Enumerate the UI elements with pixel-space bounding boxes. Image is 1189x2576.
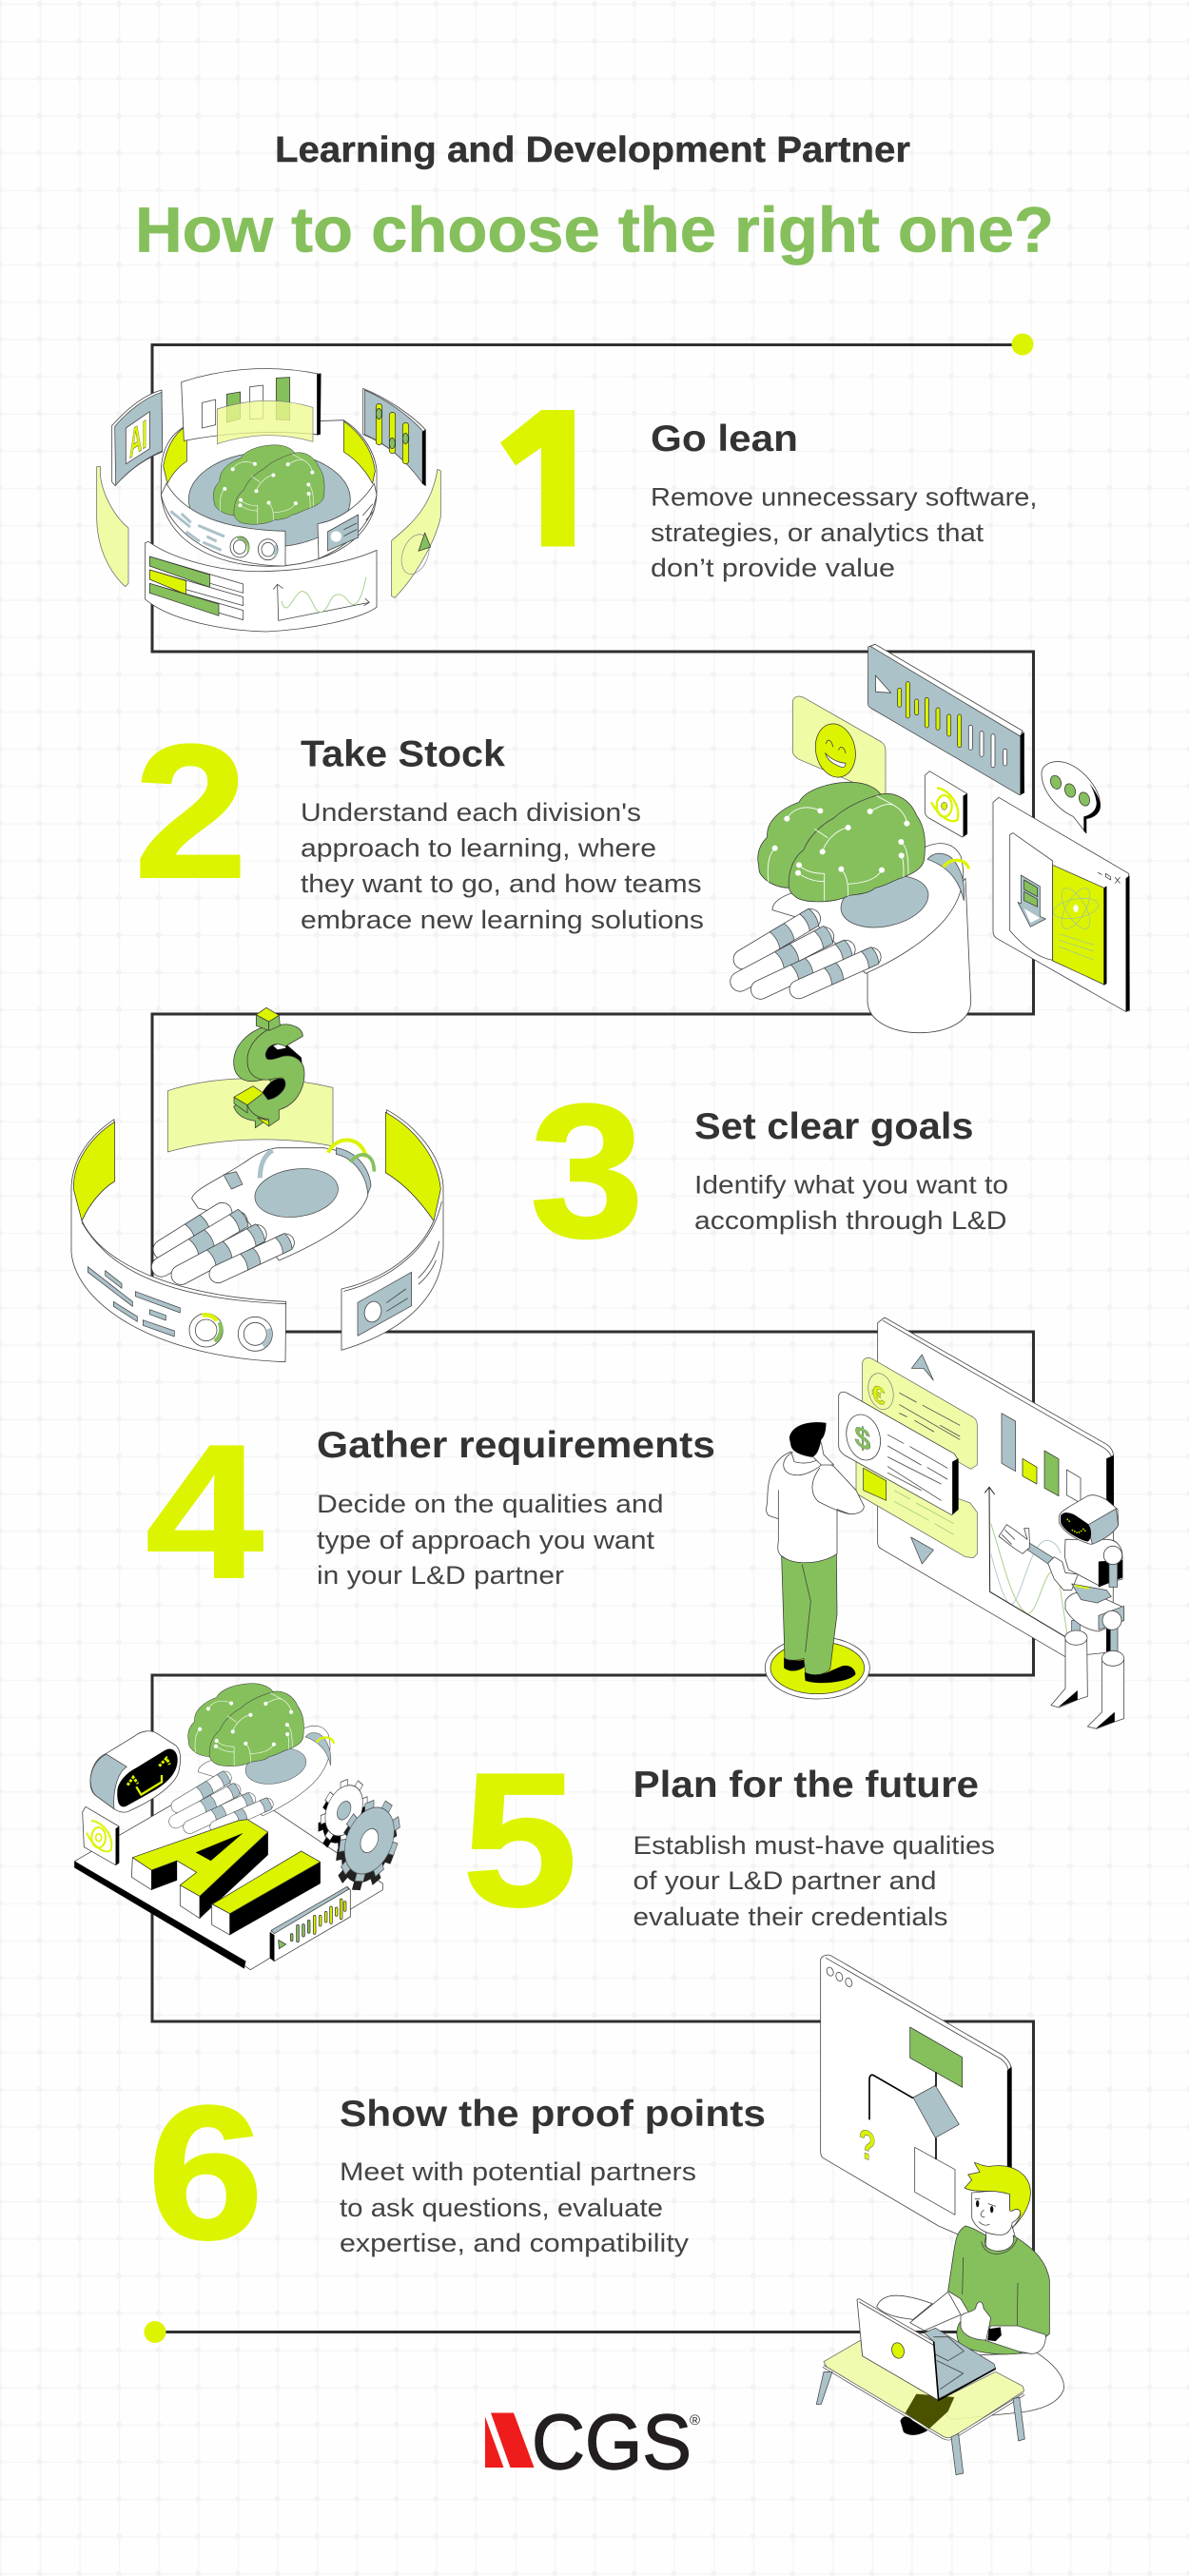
blue disc: [188, 452, 350, 547]
step 4 text: [317, 1425, 715, 1590]
robot hand: [166, 1726, 334, 1836]
big board: [878, 1317, 1114, 1657]
step 1 text: [651, 419, 1037, 582]
step 2 text: approach to learning, where: [301, 833, 656, 862]
number 2: 2: [134, 706, 247, 918]
connecting timeline frame: [145, 333, 1033, 2343]
AI panel: [112, 390, 163, 486]
slider panel: [363, 388, 425, 486]
gears: [319, 1771, 400, 1900]
flowchart board: [821, 1955, 1011, 2257]
front right card: [318, 483, 377, 558]
step 6 text: [340, 2094, 766, 2257]
bar chart panel: [182, 368, 321, 444]
green t-shirt: [948, 2226, 1049, 2354]
pale card top with euro: [863, 1357, 977, 1469]
robot hand: [727, 844, 968, 1003]
neck and face: [972, 2191, 1021, 2252]
step 5 text: evaluate their credentials: [633, 1903, 947, 1931]
step 5 text: [633, 1765, 995, 1931]
right pale panel with pie: [392, 469, 440, 597]
step 6 text: Show the proof points: [340, 2094, 766, 2135]
illustration 3: robot hand in ring with dollar sign: [71, 1007, 443, 1362]
step 4 text: type of approach you want: [317, 1526, 655, 1554]
front left ring panel: [161, 483, 285, 566]
number 4: 4: [146, 1406, 263, 1618]
step 3 text: [694, 1106, 1008, 1235]
brain: [213, 445, 324, 524]
platform: [74, 1776, 382, 1970]
man with laptop on lap desk: [816, 2162, 1064, 2475]
robot hand: [148, 1140, 374, 1288]
illustration 5: AI letters platform with brain and gears: [74, 1684, 400, 1970]
pale card top with euro: €: [872, 1378, 886, 1412]
bottom panel with bars and line chart: [146, 541, 377, 632]
step 2 text: Take Stock: [301, 734, 505, 774]
robot head screen: [90, 1731, 181, 1812]
white trousers: [877, 2295, 1064, 2419]
brain: [758, 782, 925, 902]
pale panel: [167, 1079, 333, 1152]
logo wordmark: CGS: [532, 2399, 692, 2486]
start dot: [1012, 333, 1033, 356]
step 5 text: of your L&D partner and: [633, 1866, 936, 1895]
audio bar panel: [867, 644, 1024, 795]
browser panel with book: [993, 797, 1129, 1011]
ring base: [161, 420, 377, 566]
CGS logo: [485, 2399, 700, 2486]
left arm: [910, 2292, 961, 2331]
audio panel: [270, 1886, 350, 1961]
step 2 text: [301, 734, 704, 934]
number 5: 5: [462, 1734, 577, 1946]
step 1 text: strategies, or analytics that: [651, 518, 984, 547]
step 4 text: in your L&D partner: [317, 1561, 564, 1590]
left ring band: [71, 1120, 286, 1362]
dollar sign: [234, 1007, 304, 1128]
robot arm cylinder: [867, 878, 971, 1033]
step 2 text: Understand each division's: [301, 798, 641, 827]
step 2 text: embrace new learning solutions: [301, 906, 704, 934]
step 3 text: accomplish through L&D: [694, 1206, 1006, 1235]
robot: [999, 1495, 1124, 1728]
speech bubble: [1042, 762, 1101, 833]
step 1 text: Remove unnecessary software,: [651, 483, 1037, 512]
AI 3D letters: [131, 1820, 321, 1935]
step 5 text: Plan for the future: [633, 1765, 979, 1805]
AI panel: AI: [129, 411, 146, 467]
step 1 text: don’t provide value: [651, 554, 895, 582]
laptop: [857, 2299, 996, 2400]
illustration 4: person and robot at board: [765, 1317, 1124, 1728]
illustration 6: flowchart board and man with laptop: [816, 1955, 1064, 2475]
step 2 text: they want to go, and how teams: [301, 869, 702, 898]
number 6: 6: [147, 2067, 263, 2279]
brain: [188, 1684, 303, 1766]
subtitle: Learning and Development Partner: [275, 130, 910, 170]
white card with dollar: $: [854, 1418, 870, 1458]
right ring band: [341, 1110, 443, 1350]
person standing: [765, 1422, 869, 1699]
illustration 2: brain on robot hand with panels: [727, 644, 1129, 1033]
end dot: [145, 2321, 166, 2343]
title: How to choose the right one?: [135, 194, 1054, 266]
step 4 text: Gather requirements: [317, 1425, 715, 1466]
illustration 1: brain with holographic dashboards: [97, 368, 440, 632]
step 3 text: Set clear goals: [694, 1106, 974, 1147]
number 3: 3: [530, 1065, 644, 1278]
left pale panel: [97, 467, 128, 587]
number 1: [500, 410, 575, 546]
emoji panel: [792, 696, 886, 796]
step 5 text: Establish must-have qualities: [633, 1831, 995, 1860]
pale card bottom: [856, 1462, 977, 1558]
registered mark: ®: [690, 2412, 700, 2429]
lime ring segments: [164, 421, 375, 483]
white card with dollar: [839, 1392, 958, 1515]
step 4 text: Decide on the qualities and: [317, 1490, 664, 1518]
target tile: [925, 771, 967, 837]
sleeve cuff and hand: [961, 2302, 1045, 2353]
flowchart board: ?: [859, 2119, 876, 2172]
lime hair: [965, 2162, 1030, 2228]
step 6 text: expertise, and compatibility: [340, 2229, 690, 2257]
step 6 text: to ask questions, evaluate: [340, 2194, 663, 2222]
lap desk: [816, 2340, 1024, 2475]
step 3 text: Identify what you want to: [694, 1170, 1008, 1199]
logo red mark: [485, 2412, 535, 2468]
number 1: 1: [497, 375, 602, 587]
target tile: [83, 1806, 119, 1865]
step 6 text: Meet with potential partners: [340, 2157, 696, 2186]
step 1 text: Go lean: [651, 419, 798, 459]
